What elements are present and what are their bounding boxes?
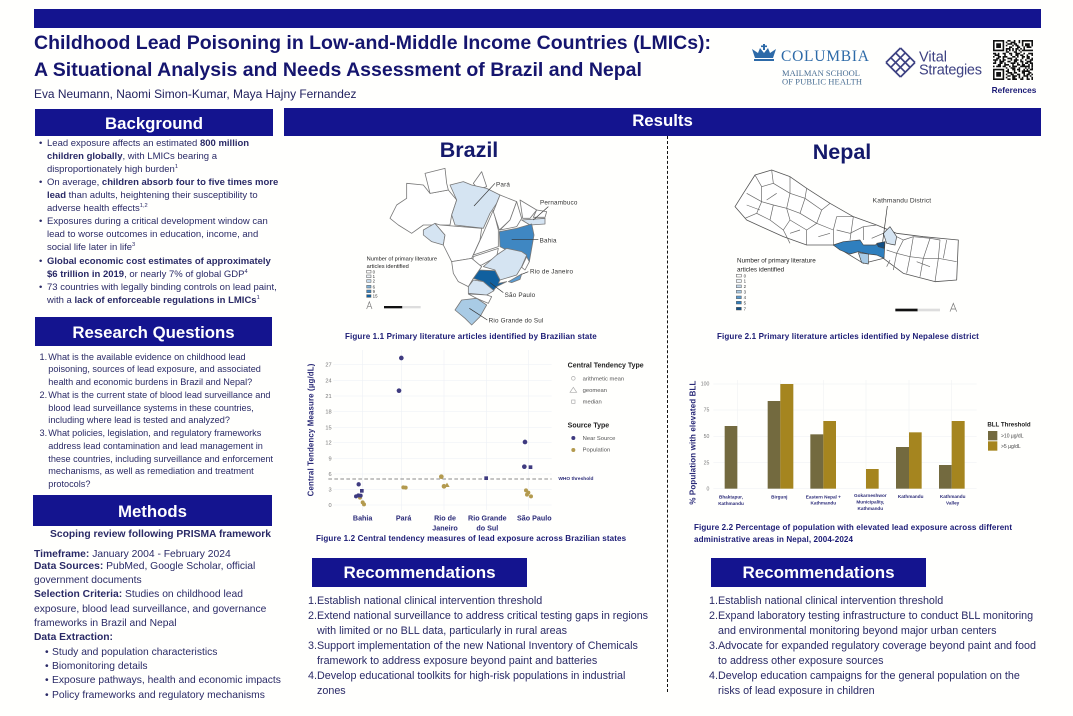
- background bullet list: On average, children absorb four to five times more: [47, 177, 278, 188]
- background bullet list: •: [39, 138, 42, 149]
- Brazil heading: Brazil: [440, 138, 498, 162]
- methods details: exposure, blood lead surveillance, and governance: [34, 604, 266, 615]
- methods heading: [33, 495, 272, 526]
- logo: Columbia Mailman School: OF PUBLIC HEALTH: [782, 76, 862, 86]
- chart: central tendency scatter plot: 24: [325, 378, 332, 384]
- figure 2.1 caption: Figure 2.1 Primary literature articles identified by Nepalese district: [717, 332, 979, 341]
- Nepal heading: Nepal: [813, 140, 871, 164]
- x axis labels: Pará: [396, 514, 411, 522]
- x axis labels: Municipality,: [856, 499, 884, 504]
- methods details: Timeframe: January 2004 - February 2024: [34, 549, 231, 560]
- x axis labels: [718, 493, 966, 511]
- chart: central tendency scatter plot: 12: [325, 441, 332, 447]
- Brazil state labels: Pernambuco: [540, 200, 578, 207]
- bars >10 µg/dL: [725, 401, 952, 489]
- QR code: [993, 40, 1033, 80]
- Kathmandu District callout: [873, 198, 931, 242]
- methods details: Exposure pathways, health and economic impacts: [52, 675, 281, 686]
- y axis title: Central Tendency Measure (µg/dL): [306, 363, 315, 496]
- scatter legend: geomean: [583, 388, 607, 394]
- background bullet list: children globally, with LMICs bearing a: [47, 151, 217, 162]
- Brazil map legend: 1: [373, 274, 376, 279]
- Brazil recommendations heading: Recommendations: [343, 563, 496, 582]
- Brazil recommendations list: zones: [317, 685, 346, 697]
- scatter legend: [568, 363, 644, 454]
- research questions list: 3.: [40, 428, 47, 438]
- x axis labels: São Paulo: [517, 514, 552, 522]
- Nepal recommendations heading: Recommendations: [742, 563, 895, 582]
- Brazil recommendations list: with limited or no BLL data, particularly in rural areas: [317, 625, 567, 637]
- Brazil recommendations list: framework to address exposure beyond paint and batteries: [317, 655, 597, 667]
- methods details: government documents: [34, 575, 142, 586]
- Nepal map legend: articles identified: [737, 266, 785, 273]
- center divider: [667, 136, 668, 692]
- Brazil state labels: Pará: [496, 181, 510, 188]
- Brazil map legend: articles identified: [367, 264, 409, 270]
- background bullet list: Exposures during a critical development window can: [47, 216, 268, 227]
- Nepal recommendations list: 4.: [709, 670, 718, 682]
- scatter legend: Population: [583, 448, 610, 454]
- background bullet list: with a lack of enforceable regulations in LMICs1: [47, 295, 260, 306]
- figure 1.1 caption: Figure 1.1 Primary literature articles identified by Brazilian state: [345, 332, 597, 341]
- Brazil map legend: 0: [373, 269, 376, 274]
- x axis labels: Kathmandu: [811, 501, 836, 506]
- research questions list: What is the available evidence on childhood lead: [48, 352, 246, 362]
- title: [34, 32, 711, 81]
- results heading: [284, 108, 1041, 136]
- Nepal map legend: 1: [744, 279, 747, 284]
- x axis labels: Kathmandu: [940, 494, 966, 499]
- Nepal map legend: Number of primary literature: [737, 258, 816, 265]
- research questions list: What is the current state of blood lead surveillance and: [48, 390, 270, 400]
- Brazil recommendations list: Develop educational toolkits for high-risk populations in industrial: [317, 670, 625, 682]
- panel: research questions: [35, 317, 273, 489]
- Nepal recommendations list: and environmental monitoring beyond major urban centers: [718, 625, 996, 637]
- Brazil recommendations list: 2.: [308, 610, 317, 622]
- methods details: [34, 549, 281, 701]
- methods details: Policy frameworks and regulatory mechanisms: [52, 690, 265, 701]
- panel: Brazil recommendations: [308, 558, 648, 697]
- x axis labels: Kathmandu: [718, 501, 744, 506]
- research questions list: including where lead is tested and analyzed?: [48, 415, 230, 425]
- methods details: •: [45, 675, 49, 686]
- panel: background: [35, 109, 278, 306]
- chart: elevated BLL bar chart: 100: [701, 382, 709, 388]
- methods subheading: Scoping review following PRISMA framework: [50, 529, 271, 540]
- chart: central tendency scatter plot: WHO threshold: [558, 476, 594, 482]
- background bullet list: adverse health effects1,2: [47, 203, 148, 214]
- background bullet list: disproportionately high burden1: [47, 164, 178, 175]
- chart: elevated BLL bar chart: [688, 380, 1031, 511]
- logo: Columbia Mailman School: MAILMAN SCHOOL: [782, 68, 860, 78]
- chart: central tendency scatter plot: 18: [325, 410, 332, 416]
- Nepal recommendations list: to address other exposure sources: [718, 655, 884, 667]
- background bullet list: social life later in life3: [47, 242, 135, 253]
- chart: central tendency scatter plot: 0: [329, 503, 332, 509]
- near source points: [354, 356, 532, 498]
- x axis labels: Janeiro: [432, 525, 458, 533]
- Brazil recommendations list: [308, 595, 648, 697]
- logo: Columbia Mailman School: [752, 44, 870, 86]
- results heading: Results: [632, 111, 693, 130]
- scatter legend: Central Tendency Type: [568, 363, 644, 370]
- chart: central tendency scatter plot: 3: [329, 487, 332, 493]
- methods details: frameworks in Brazil and Nepal: [34, 618, 176, 629]
- Nepal recommendations list: Develop education campaigns for the general population on the: [718, 670, 1020, 682]
- bar chart legend: [987, 422, 1031, 451]
- background bullet list: Lead exposure affects an estimated 800 million: [47, 138, 249, 149]
- Nepal recommendations list: 3.: [709, 640, 718, 652]
- x axis labels: Kathmandu: [898, 494, 924, 499]
- methods details: Data Sources: PubMed, Google Scholar, official: [34, 561, 255, 572]
- background heading: [35, 109, 273, 136]
- x axis labels: Kathmandu: [858, 506, 883, 511]
- methods details: Study and population characteristics: [52, 647, 217, 658]
- chart: central tendency scatter plot: [306, 350, 644, 533]
- logo: Columbia Mailman School: COLUMBIA: [781, 48, 870, 65]
- figure 1.2 caption: Figure 1.2 Central tendency measures of lead exposure across Brazilian states: [316, 534, 626, 543]
- background bullet list: lead to worse outcomes in education, income, and: [47, 229, 258, 240]
- authors: Eva Neumann, Naomi Simon-Kumar, Maya Hajny Fernandez: [34, 87, 356, 101]
- background bullet list: 73 countries with legally binding controls on lead paint,: [47, 282, 277, 293]
- Brazil map legend: 2: [373, 279, 376, 284]
- y axis title: % Population with elevated BLL: [688, 381, 697, 505]
- population points: [358, 474, 533, 506]
- x axis labels: Bahia: [353, 514, 373, 522]
- x axis labels: [353, 514, 552, 533]
- methods details: •: [45, 661, 49, 672]
- Brazil state labels: [489, 181, 578, 325]
- bar chart legend: >5 µg/dL: [1001, 444, 1021, 450]
- chart: central tendency scatter plot: 9: [329, 456, 332, 462]
- Nepal map legend: 4: [744, 295, 747, 300]
- chart: central tendency scatter plot: 21: [325, 394, 332, 400]
- Nepal recommendations list: 1.: [709, 595, 718, 607]
- Brazil recommendations list: 3.: [308, 640, 317, 652]
- background bullet list: Global economic cost estimates of approximately: [47, 256, 271, 267]
- Nepal map legend: 5: [744, 300, 747, 305]
- x axis labels: do Sul: [476, 525, 498, 533]
- methods details: •: [45, 647, 49, 658]
- scatter legend: arithmetic mean: [583, 376, 624, 382]
- Nepal recommendations list: [709, 595, 1036, 697]
- background bullet list: •: [39, 282, 42, 293]
- methods details: Biomonitoring details: [52, 661, 148, 672]
- Brazil callout lines: [469, 183, 548, 320]
- chart: elevated BLL bar chart: 0: [706, 486, 709, 492]
- research questions list: blood lead surveillance systems in these countries,: [48, 402, 254, 412]
- x axis labels: Bhaktapur,: [719, 495, 743, 500]
- map: Brazil states: [366, 168, 578, 326]
- logo: Vital Strategies: Vital: [919, 50, 947, 66]
- Nepal map legend: 2: [744, 284, 747, 289]
- background bullet list: •: [39, 177, 42, 188]
- Brazil recommendations list: 1.: [308, 595, 317, 607]
- Nepal map legend: [736, 258, 957, 312]
- methods heading: Methods: [118, 502, 187, 521]
- figure 2.2 caption: [694, 523, 1012, 544]
- Nepal recommendations list: Expand laboratory testing infrastructure to conduct BLL monitoring: [718, 610, 1033, 622]
- methods details: •: [45, 690, 49, 701]
- Nepal recommendations list: Establish national clinical intervention threshold: [718, 595, 943, 607]
- Nepal map legend: 3: [744, 289, 747, 294]
- Kathmandu District callout: Kathmandu District: [873, 198, 931, 205]
- Brazil recommendations list: 4.: [308, 670, 317, 682]
- figure 2.2 caption: administrative areas in Nepal, 2004-2024: [694, 535, 853, 544]
- methods details: Data Extraction:: [34, 632, 113, 643]
- chart: elevated BLL bar chart: 75: [704, 408, 709, 414]
- background bullet list: lead than adults, heightening their susceptibility to: [47, 190, 258, 201]
- x axis labels: Rio de: [434, 514, 456, 522]
- map: Nepal districts: [734, 170, 959, 312]
- research questions list: health and economic burdens in Brazil and Nepal?: [48, 377, 252, 387]
- Brazil map legend: Number of primary literature: [367, 256, 437, 262]
- chart: elevated BLL bar chart: 50: [704, 434, 709, 440]
- logo: Vital Strategies: [886, 47, 982, 78]
- Nepal recommendations list: risks of lead exposure in children: [718, 685, 875, 697]
- bar chart legend: >10 µg/dL: [1001, 433, 1024, 439]
- research questions heading: Research Questions: [72, 323, 235, 342]
- background bullet list: •: [39, 216, 42, 227]
- Brazil map legend: 6: [373, 284, 376, 289]
- research questions list: poisoning, sources of lead exposure, and associated: [48, 364, 261, 374]
- title: A Situational Analysis and Needs Assessment of Brazil and Nepal: [34, 59, 642, 81]
- x axis labels: Eastern Nepal +: [806, 494, 841, 499]
- title: Childhood Lead Poisoning in Low-and-Middle Income Countries (LMICs):: [34, 32, 711, 54]
- background bullet list: [39, 138, 278, 306]
- research questions list: [40, 352, 273, 489]
- Brazil state labels: Bahia: [540, 237, 557, 244]
- Brazil state labels: Rio de Janeiro: [530, 269, 573, 276]
- top banner: [34, 9, 1041, 28]
- research questions list: these countries, including surveillance and enforcement: [48, 454, 273, 464]
- Brazil map legend: 15: [373, 294, 378, 299]
- research questions list: 1.: [40, 352, 47, 362]
- logo: Vital Strategies: Strategies: [919, 62, 982, 78]
- Brazil recommendations list: Support implementation of the new National Inventory of Chemicals: [317, 640, 638, 652]
- chart: central tendency scatter plot: 6: [329, 472, 332, 478]
- Nepal map legend: 0: [744, 273, 747, 278]
- references label: References: [992, 85, 1036, 95]
- panel: methods: [33, 495, 281, 701]
- background bullet list: •: [39, 256, 42, 267]
- chart: elevated BLL bar chart: 25: [704, 460, 709, 466]
- Nepal map legend: 7: [744, 306, 747, 311]
- research questions list: mechanisms, as well as remediation and treatment: [48, 466, 254, 476]
- research questions list: protocols?: [48, 479, 90, 489]
- scatter legend: median: [583, 399, 602, 405]
- Nepal recommendations list: Advocate for expanded regulatory coverage beyond paint and food: [718, 640, 1036, 652]
- methods details: Selection Criteria: Studies on childhood lead: [34, 589, 243, 600]
- Brazil recommendations list: Establish national clinical intervention threshold: [317, 595, 542, 607]
- chart: central tendency scatter plot: 15: [325, 425, 332, 431]
- research questions list: address lead contamination and lead management in: [48, 441, 263, 451]
- research questions list: 2.: [40, 390, 47, 400]
- x axis labels: Valley: [946, 501, 960, 506]
- scatter legend: Near Source: [583, 436, 615, 442]
- bar chart legend: BLL Threshold: [987, 422, 1031, 429]
- Brazil recommendations heading: [312, 558, 527, 587]
- x axis labels: Rio Grande: [468, 514, 507, 522]
- WHO threshold line: [328, 478, 552, 480]
- Brazil state labels: São Paulo: [505, 292, 536, 299]
- research questions list: What policies, legislation, and regulatory frameworks: [48, 428, 261, 438]
- Nepal recommendations list: 2.: [709, 610, 718, 622]
- x axis labels: Gokarneshwor: [854, 493, 887, 498]
- research questions heading: [35, 317, 272, 346]
- Nepal recommendations heading: [711, 558, 926, 587]
- background heading: Background: [105, 114, 203, 133]
- background bullet list: $6 trillion in 2019, or nearly 7% of global GDP4: [47, 269, 248, 280]
- figure 2.2 caption: Figure 2.2 Percentage of population with elevated lead exposure across different: [694, 523, 1012, 532]
- chart: central tendency scatter plot: 27: [325, 363, 332, 369]
- x axis labels: Birgunj: [771, 495, 787, 500]
- panel: Nepal recommendations: [709, 558, 1036, 697]
- Brazil recommendations list: Extend national surveillance to address critical testing gaps in regions: [317, 610, 648, 622]
- bars >5 µg/dL: [780, 384, 965, 489]
- scatter legend: Source Type: [568, 423, 609, 430]
- Brazil map legend: 9: [373, 289, 376, 294]
- Brazil state labels: Rio Grande do Sul: [489, 318, 544, 325]
- Brazil map legend: [367, 256, 437, 309]
